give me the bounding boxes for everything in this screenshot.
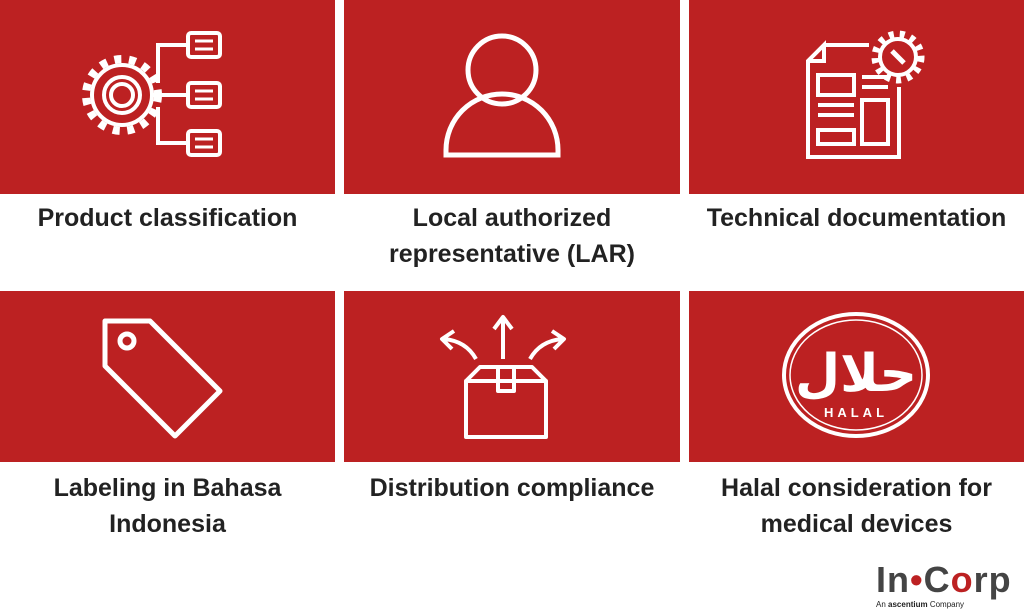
label: product classification: Product classification [38, 204, 297, 232]
logo: InCorp: In•Corp [876, 559, 1012, 600]
panel: product classification [0, 0, 335, 194]
label: halal: Halal consideration for [721, 474, 992, 502]
panel: labeling [0, 291, 335, 462]
panel: technical documentation [689, 0, 1024, 194]
icon: document with gear [806, 30, 924, 159]
label: halal [721, 474, 992, 538]
label: labeling: Labeling in Bahasa [54, 474, 281, 502]
panel: LAR [344, 0, 680, 194]
icon: halal logo [782, 312, 930, 438]
panel: distribution [344, 291, 680, 462]
panel: halal [689, 291, 1024, 462]
logo: InCorp: An ascentium Company [876, 600, 964, 609]
icon: box with arrows [440, 314, 566, 439]
label: LAR: Local authorized [413, 204, 611, 232]
label: halal: medical devices [761, 510, 952, 538]
icon: gear with lists [82, 31, 222, 157]
label: LAR [389, 204, 635, 268]
icon: halal logo: حلال [795, 344, 917, 404]
icon: halal logo: HALAL [824, 405, 888, 420]
label: LAR: representative (LAR) [389, 240, 635, 268]
label: technical documentation: Technical documentation [707, 204, 1006, 232]
icon: person [444, 34, 560, 158]
icon: tag [102, 318, 222, 438]
label: distribution: Distribution compliance [370, 474, 654, 502]
label: labeling [54, 474, 282, 538]
label: labeling: Indonesia [109, 510, 226, 538]
